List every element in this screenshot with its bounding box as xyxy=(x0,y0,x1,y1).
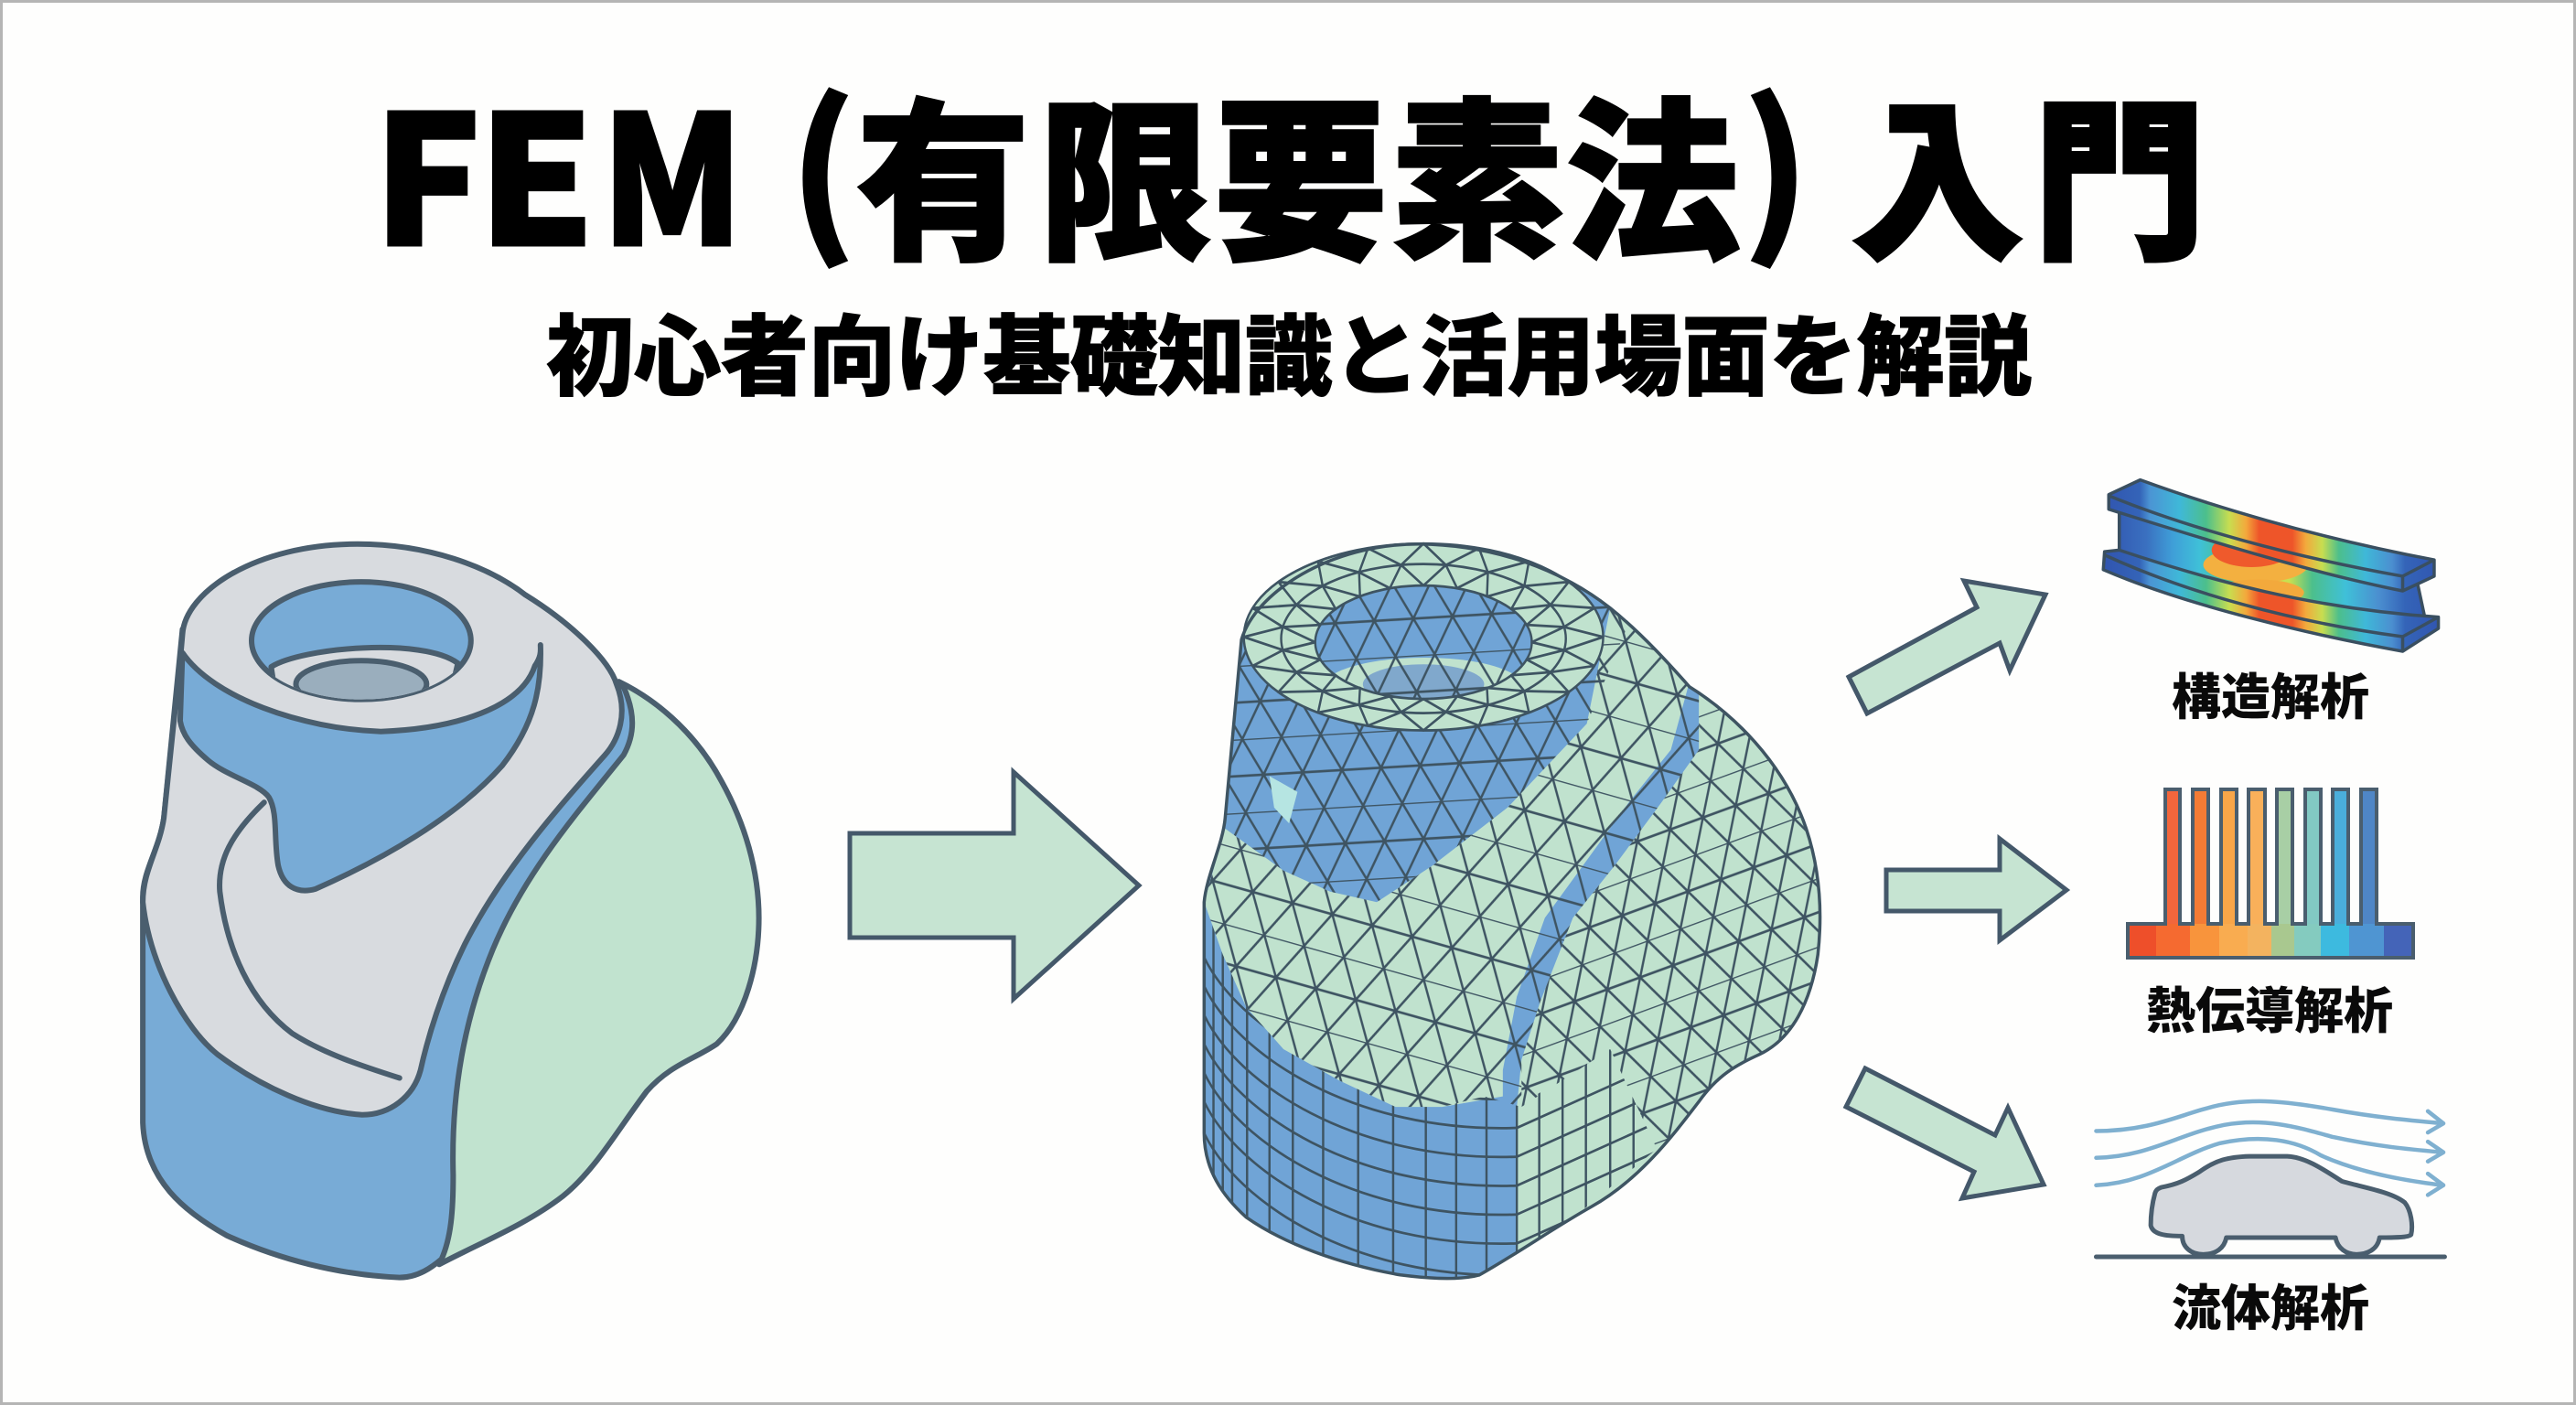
arrow: CAD to mesh xyxy=(850,772,1139,999)
blue body xyxy=(143,629,632,1278)
quad grid on cylinder xyxy=(1204,923,1657,1291)
bore hole xyxy=(252,582,471,713)
title: 有限要素法 xyxy=(856,44,1740,295)
green surfaces and triangular mesh xyxy=(1206,589,1819,1249)
title xyxy=(373,32,2206,297)
title: 入門 xyxy=(1851,44,2206,295)
title: ) xyxy=(1741,32,1810,284)
beam bottom flange xyxy=(2103,550,2439,651)
sweep curve on face xyxy=(220,802,400,1078)
top ring with hole xyxy=(1244,543,1604,731)
ground line xyxy=(2096,1254,2444,1259)
label: structural analysis: 構造解析 xyxy=(2172,657,2369,729)
grey upper surface xyxy=(143,544,622,1115)
airflow streamlines xyxy=(2096,1101,2443,1195)
beam web xyxy=(2117,514,2426,615)
heat sink base xyxy=(2128,924,2413,958)
subtitle: 初心者向け基礎知識と活用場面を解説 xyxy=(546,286,2032,413)
icon: heat sink temperature map xyxy=(2128,789,2413,958)
FEM mesh model xyxy=(1204,543,1843,1291)
arrow: to structural analysis xyxy=(1849,581,2045,713)
green lobe xyxy=(418,681,759,1264)
beam top flange xyxy=(2109,480,2434,591)
arrow: to fluid analysis xyxy=(1846,1068,2044,1198)
blue recess under top ring xyxy=(180,645,541,891)
label: heat conduction analysis: 熱伝導解析 xyxy=(2146,971,2393,1043)
title: M xyxy=(601,37,744,297)
title: F xyxy=(373,38,481,297)
heat sink fins xyxy=(2165,789,2377,924)
arrow: to heat conduction analysis xyxy=(1886,839,2066,940)
title: E xyxy=(478,38,595,297)
CAD model: smooth 3D part xyxy=(143,544,759,1278)
icon: car with airflow xyxy=(2096,1101,2444,1257)
mesh outline xyxy=(1204,544,1820,1279)
heat sink outline xyxy=(2128,789,2413,958)
mesh body base xyxy=(1204,544,1820,1279)
title: ( xyxy=(789,32,858,284)
icon: I-beam stress contour xyxy=(2103,480,2439,651)
car body xyxy=(2151,1156,2412,1254)
label: fluid analysis: 流体解析 xyxy=(2172,1268,2369,1340)
